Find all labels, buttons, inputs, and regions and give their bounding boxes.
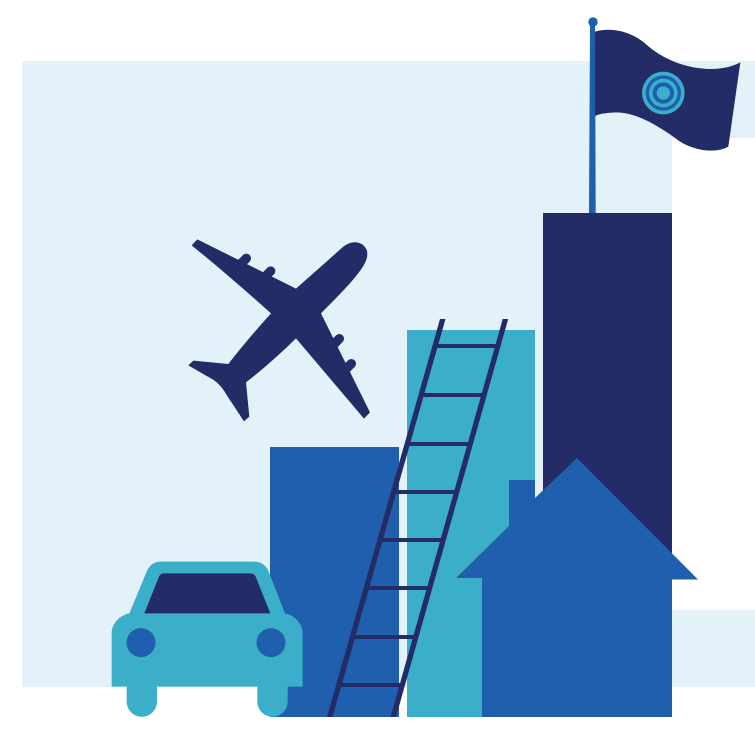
icon: house <box>456 458 698 717</box>
airplane engines <box>241 258 351 369</box>
airplane fuselage and wings <box>188 239 370 421</box>
bar: blue short <box>270 447 399 717</box>
car body <box>112 562 303 717</box>
car headlight right <box>256 628 285 657</box>
icon: car <box>112 562 303 717</box>
flag target emblem <box>642 72 685 114</box>
bar: teal medium <box>407 330 535 717</box>
icon: airplane <box>188 239 370 421</box>
flag <box>595 30 740 151</box>
ladder rails <box>327 319 508 717</box>
bar: navy tall <box>543 213 672 613</box>
ladder rungs <box>340 346 498 685</box>
ladder <box>327 319 508 717</box>
flag cloth <box>595 30 740 151</box>
car windshield <box>144 573 270 613</box>
flag pole <box>588 17 598 213</box>
car headlight left <box>126 628 155 657</box>
